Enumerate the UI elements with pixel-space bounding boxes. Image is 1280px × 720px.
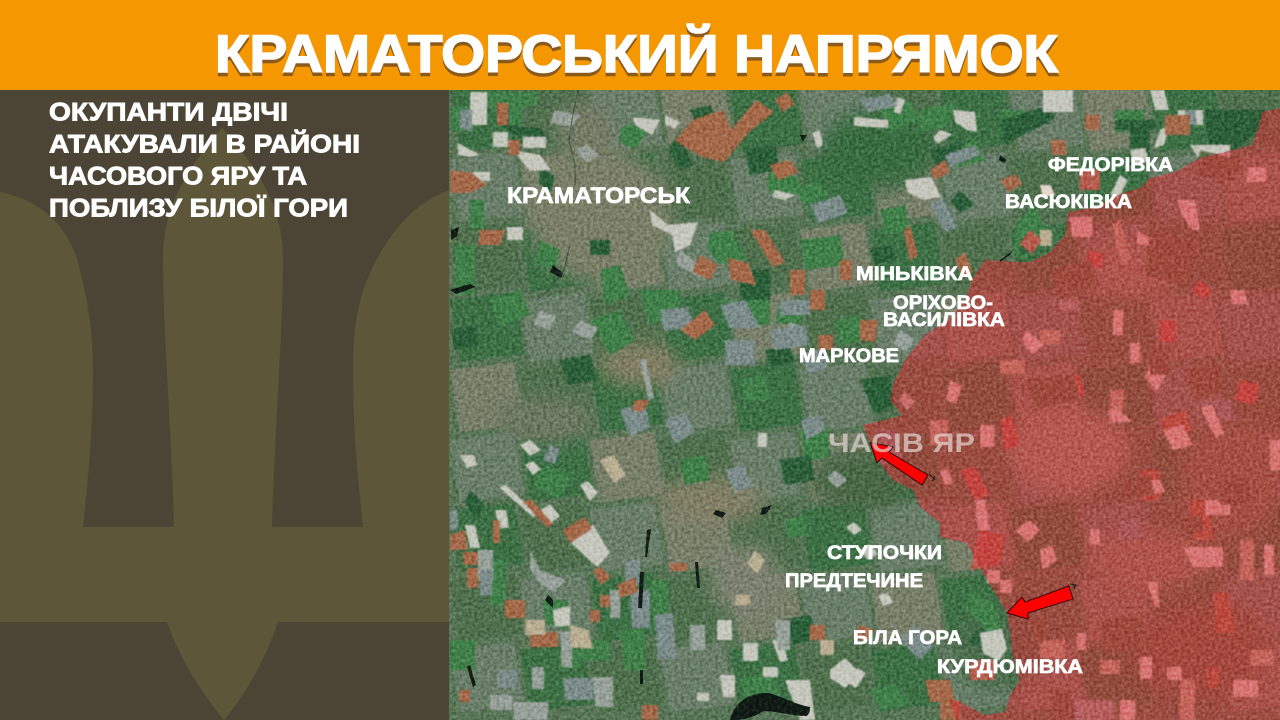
map label: Chasiv Yar: ЧАСІВ ЯР [828, 428, 975, 458]
map label: Stupochky: СТУПОЧКИ [827, 543, 942, 564]
icon: trident emblem [0, 128, 450, 720]
map label: Predtechyne: ПРЕДТЕЧИНЕ [785, 571, 923, 592]
map label: Bila Hora: БІЛА ГОРА [853, 628, 962, 649]
left panel [0, 90, 450, 720]
farm fields [450, 90, 1280, 720]
occupied zone overlay [863, 108, 1280, 720]
map label: Orikhovo-Vasylivka [883, 293, 1005, 331]
map label: Orikhovo-Vasylivka: ОРІХОВО- [893, 293, 993, 314]
map label: Minkivka: МІНЬКІВКА [856, 264, 973, 285]
map label: Markove: МАРКОВЕ [799, 346, 899, 367]
summary text: ЧАСОВОГО ЯРУ ТА [49, 162, 307, 190]
map label: Orikhovo-Vasylivka: ВАСИЛІВКА [883, 310, 1005, 331]
arrow: attack at Bila Hora [1007, 584, 1076, 619]
title: КРАМАТОРСЬКИЙ НАПРЯМОК [215, 23, 1059, 84]
summary text: ПОБЛИЗУ БІЛОЇ ГОРИ [49, 194, 348, 222]
summary text: ОКУПАНТИ ДВІЧІ [49, 98, 288, 126]
map label: Fedorivka: ФЕДОРІВКА [1048, 155, 1173, 176]
map label: Vasiukivka: ВАСЮКІВКА [1005, 192, 1132, 213]
satellite map [449, 82, 1280, 720]
arrow: attack at Chasiv Yar [870, 443, 935, 485]
map label: Kurdiumivka: КУРДЮМІВКА [937, 657, 1083, 678]
summary text: АТАКУВАЛИ В РАЙОНІ [49, 128, 360, 158]
header bar [0, 0, 1280, 90]
fields in the occupied zone [940, 167, 1280, 720]
summary text [49, 98, 360, 222]
rivers and water [450, 90, 1012, 720]
texture [449, 90, 1280, 720]
title: КРАМАТОРСЬКИЙ НАПРЯМОК [215, 26, 1059, 88]
map label: Kramatorsk: КРАМАТОРСЬК [507, 183, 691, 208]
field patchwork base [450, 82, 1280, 712]
